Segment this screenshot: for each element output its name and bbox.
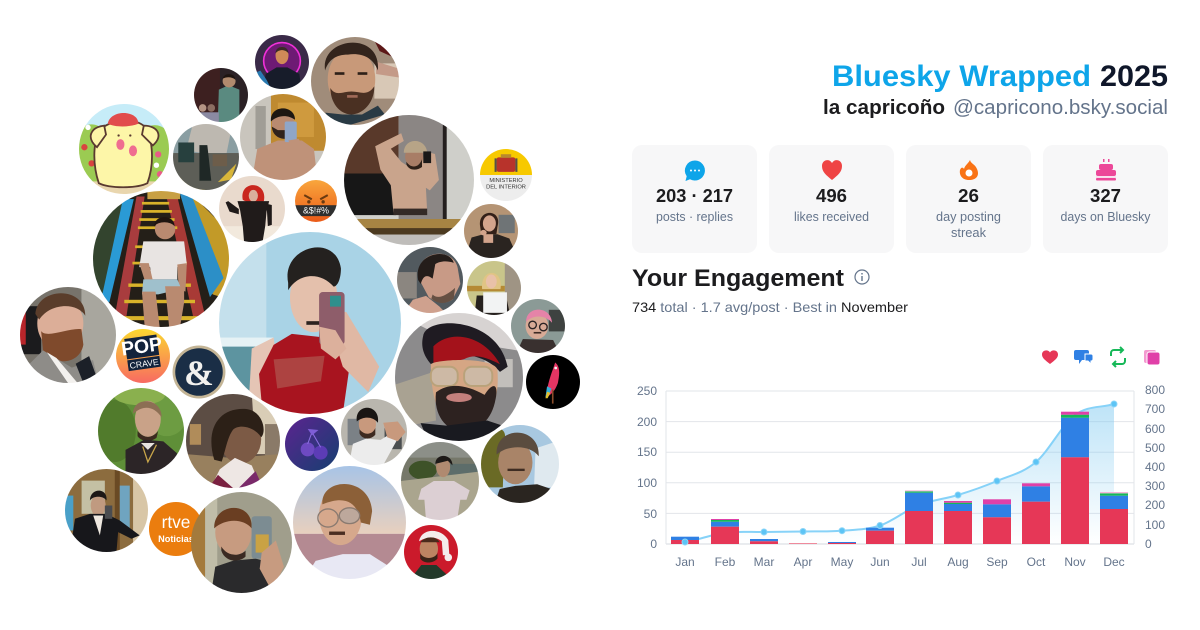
avatar: rtve Noticias logo: rtve	[162, 512, 190, 532]
month labels: May	[831, 555, 853, 569]
icon: quotes	[1144, 350, 1160, 365]
avatar: red-dyed hair, glasses and cap	[395, 313, 523, 441]
left axis labels: 250	[637, 384, 657, 398]
legend: engagement type icons	[1042, 347, 1160, 367]
avatar: man at venue with audience	[194, 68, 248, 122]
month labels: Mar	[754, 555, 774, 569]
avatar: curly hair looking up	[186, 394, 280, 488]
stat card: day posting streak: day posting	[936, 209, 1001, 224]
avatar: portrait with neon ring	[255, 35, 309, 89]
avatar: Pop Crave logo: POP	[120, 333, 164, 361]
right axis labels: 600	[1145, 422, 1165, 436]
right axis labels: 800	[1145, 383, 1165, 397]
month labels: Apr	[794, 555, 812, 569]
left axis labels: 200	[637, 415, 657, 429]
avatar: dark t-shirt phone selfie	[191, 492, 292, 593]
avatar: angry emoji with censored swearing	[295, 180, 337, 222]
avatar: Dungeons & Dragons ampersand logo	[172, 346, 226, 398]
month labels: Dec	[1103, 555, 1125, 569]
profile name and handle: la capricoño	[823, 97, 945, 119]
stat card: likes received	[769, 145, 894, 253]
icon: info	[855, 270, 869, 284]
cumulative line	[685, 404, 1114, 542]
avatar: man sitting on colourful stairs	[93, 191, 229, 327]
engagement summary: 734 total · 1.7 avg/post · Best in November	[632, 299, 908, 315]
avatar: flexing in gold-framed mirror	[344, 115, 474, 245]
avatar: angry emoji with censored swearing: &$!#%	[303, 206, 329, 216]
stacked bars	[671, 412, 1128, 544]
avatar: main mirror selfie in red halter	[219, 232, 401, 414]
right axis labels: 700	[1145, 402, 1165, 416]
chart: monthly engagement with cumulative line	[637, 383, 1165, 569]
avatar: pompompurin with strawberry hat	[79, 104, 169, 194]
icon: replies	[1074, 350, 1093, 364]
stat card: day posting streak	[906, 145, 1031, 253]
avatar: Pop Crave logo: CRAVE	[129, 357, 159, 371]
right axis labels	[1145, 383, 1165, 551]
profile name and handle	[823, 97, 1168, 119]
stat card: days on Bluesky: 327	[1090, 186, 1121, 206]
avatar cluster	[20, 35, 580, 593]
month labels	[675, 555, 1125, 569]
profile name and handle: @capricono.bsky.social	[953, 97, 1168, 119]
avatar: Ministerio del Interior logo: MINISTERIO	[489, 178, 523, 184]
month labels: Aug	[947, 555, 969, 569]
stat card: days on Bluesky: days on Bluesky	[1060, 209, 1151, 224]
stat card: days on Bluesky	[1043, 145, 1168, 253]
avatar: Ministerio del Interior logo: DEL INTERIOR	[486, 185, 526, 191]
title: 2025	[1100, 60, 1168, 93]
month labels: Nov	[1064, 555, 1086, 569]
title: Bluesky Wrapped	[832, 60, 1091, 93]
avatar: shirtless mirror selfie by door	[240, 94, 326, 180]
avatar: reflective mirror ball	[173, 124, 239, 190]
right axis labels: 400	[1145, 460, 1165, 474]
right axis labels: 500	[1145, 441, 1165, 455]
avatar: Ministerio del Interior logo	[480, 149, 532, 201]
line data points	[682, 401, 1117, 545]
stat card: day posting streak: 26	[958, 186, 979, 206]
icon: reposts	[1111, 347, 1125, 367]
avatar: man with beard, close-up	[311, 37, 399, 125]
avatar: selfie with long beard	[20, 287, 116, 383]
avatar: side profile shirtless	[397, 247, 463, 313]
avatar: man in pink t-shirt at stone wall	[401, 442, 479, 520]
avatar: blonde woman holding sign	[467, 261, 521, 315]
month labels: Jun	[870, 555, 890, 569]
avatar: purple cherries on gradient	[285, 417, 339, 471]
avatar: woman with hand on chin	[464, 204, 518, 258]
stat card: posts and replies: posts · replies	[656, 209, 733, 224]
right axis labels: 200	[1145, 498, 1165, 512]
avatar: black background with red parrot	[526, 355, 580, 409]
avatar: pink hair with glasses	[511, 299, 565, 353]
left axis labels: 150	[637, 445, 657, 459]
left axis labels	[637, 384, 657, 551]
month labels: Sep	[986, 555, 1008, 569]
avatar: rtve Noticias logo	[149, 502, 200, 556]
avatar: Dungeons & Dragons ampersand logo: &	[184, 353, 214, 393]
left axis labels: 100	[637, 476, 657, 490]
month labels: Jan	[675, 555, 695, 569]
left axis labels: 0	[650, 537, 657, 551]
cumulative area fill	[685, 404, 1114, 544]
heading: Your Engagement: Your Engagement	[632, 265, 844, 292]
avatar: man making hand gesture	[341, 399, 407, 465]
right axis labels: 100	[1145, 518, 1165, 532]
right axis labels: 0	[1145, 537, 1152, 551]
stat card: posts and replies	[632, 145, 757, 253]
avatar: sunset portrait against blue sky	[481, 425, 559, 503]
icon: heart	[1042, 350, 1058, 364]
avatar: Pop Crave logo	[116, 329, 170, 383]
left axis labels: 50	[644, 507, 657, 521]
avatar: blazer mirror selfie	[65, 469, 148, 552]
month labels: Feb	[715, 555, 736, 569]
month labels: Oct	[1027, 555, 1046, 569]
avatar: santa hat on red background	[404, 525, 458, 579]
stat card: likes received: likes received	[794, 209, 869, 224]
right axis labels: 300	[1145, 479, 1165, 493]
stat card: likes received: 496	[816, 186, 847, 206]
month labels: Jul	[911, 555, 927, 569]
stat card: posts and replies: 203 · 217	[656, 186, 733, 206]
avatar: green foliage selfie	[98, 388, 184, 474]
avatar: rtve Noticias logo: Noticias	[158, 534, 194, 544]
avatar: drag performer in black velvet dress	[219, 176, 285, 242]
stat card: day posting streak: streak	[951, 225, 986, 240]
avatar: glasses at lavender sunset	[293, 466, 406, 579]
